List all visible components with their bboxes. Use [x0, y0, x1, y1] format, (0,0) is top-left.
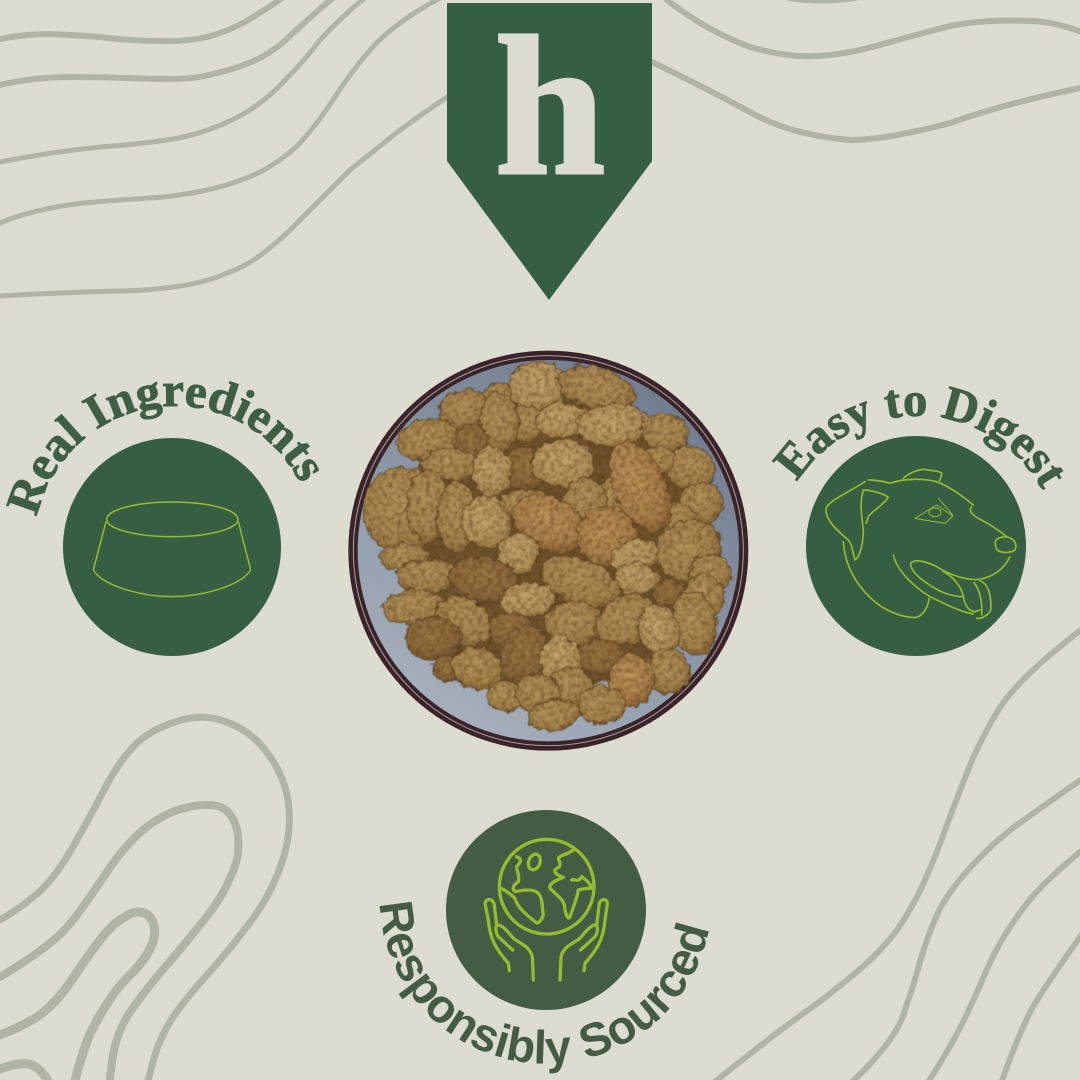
- heading: curved label: Real Ingredients: [6, 381, 320, 516]
- panel: Easy to Digest: [772, 386, 1064, 656]
- icon: hands holding globe: [485, 839, 607, 980]
- kibble pile: [363, 358, 732, 735]
- photo: bowl of freeze-dried dog food: [348, 351, 748, 751]
- panel: Responsibly Sourced: [380, 810, 709, 1074]
- heading: curved label: Responsibly Sourced: [380, 902, 709, 1074]
- bowl rim and dish: [348, 351, 748, 751]
- badge circle: [806, 436, 1026, 656]
- logo: green pennant with h: [447, 0, 652, 300]
- badge circle: [63, 438, 281, 656]
- icon: dog bowl: [93, 502, 251, 597]
- badge circle: [446, 810, 646, 1010]
- logo: green pennant with h: h: [495, 0, 605, 217]
- icon: dog head: [826, 469, 1016, 618]
- heading: curved label: Easy to Digest: [772, 386, 1064, 490]
- panel: Real Ingredients: [6, 381, 320, 656]
